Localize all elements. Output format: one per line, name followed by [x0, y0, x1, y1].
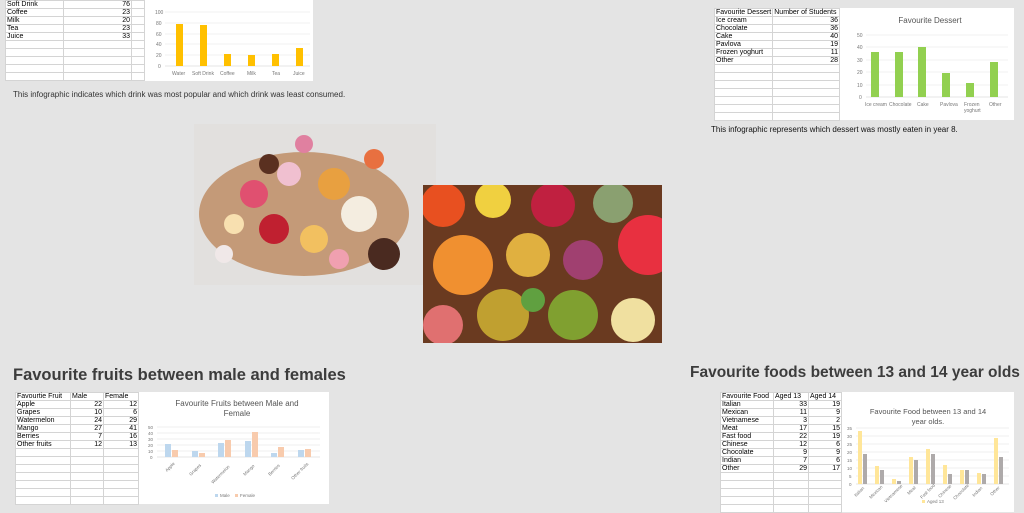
drink bar chart: Milk — [247, 71, 256, 77]
fruits bar chart: Favourite Fruits between Male and — [175, 399, 299, 408]
foods bar chart: 20 — [847, 450, 853, 455]
foods bar chart: Chocolate — [952, 482, 970, 501]
dessert bar chart: Ice cream — [865, 102, 887, 108]
foods table: Chocolate — [722, 449, 754, 456]
dessert bar chart: 50 — [857, 33, 863, 39]
drink table: Coffee — [7, 9, 28, 16]
fruits bar chart: Berries — [267, 463, 281, 477]
foods table — [720, 392, 842, 513]
drink bar chart: Tea — [272, 71, 280, 77]
dessert table: 36 — [830, 17, 838, 24]
fruits bar chart: 40 — [148, 431, 154, 436]
foods table: Indian — [722, 457, 741, 464]
dessert table: Other — [716, 57, 734, 64]
foods bar chart: Aged 13 — [927, 499, 944, 504]
dessert table: Number of Students — [774, 9, 837, 16]
foods bar chart: 10 — [847, 466, 853, 471]
drink bar chart: Soft Drink — [192, 71, 214, 77]
dessert bar chart: Cake — [917, 102, 929, 108]
fruits table: 7 — [98, 433, 102, 440]
dessert table: Ice cream — [716, 17, 747, 24]
dessert bar chart: Chocolate — [889, 102, 912, 108]
fruits bar chart: 10 — [148, 449, 154, 454]
foods bar chart: 5 — [849, 474, 852, 479]
drink bar chart: Coffee — [220, 71, 235, 77]
fruits table: 27 — [94, 425, 102, 432]
dessert bar chart: 10 — [857, 83, 863, 89]
foods table: 11 — [800, 409, 807, 416]
heading: fruits: Favourite fruits between male and females — [13, 366, 346, 384]
drink table: 33 — [122, 33, 130, 40]
dessert bar chart: 30 — [857, 58, 863, 64]
drink bar chart: 80 — [156, 21, 162, 27]
foods table: Chinese — [722, 441, 748, 448]
foods bar chart: Italian — [853, 485, 866, 498]
foods bar chart: Indian — [971, 485, 984, 498]
drink table: 23 — [122, 9, 130, 16]
fruits bar chart: 30 — [148, 437, 154, 442]
dessert table: Chocolate — [716, 25, 748, 32]
fruits bar chart: 20 — [148, 443, 154, 448]
fruits table: Male — [72, 393, 87, 400]
fruits table: 6 — [133, 409, 137, 416]
fruits table: 16 — [129, 433, 137, 440]
foods table: 17 — [799, 425, 807, 432]
drink bar chart: 60 — [156, 32, 162, 38]
foods bar chart: year olds. — [912, 417, 944, 426]
fruits bar chart: Male — [220, 493, 230, 498]
heading: foods: Favourite foods between 13 and 14 year olds — [690, 364, 1020, 381]
fruits table: Grapes — [17, 409, 40, 416]
drink table: 20 — [122, 17, 130, 24]
drink table: Tea — [7, 25, 18, 32]
foods table: Vietnamese — [722, 417, 759, 424]
foods bar chart: 30 — [847, 434, 853, 439]
fruits bar chart: Grapes — [188, 462, 203, 477]
foods table: 15 — [832, 425, 840, 432]
fruits table: Other fruits — [17, 441, 52, 448]
fruits table: 10 — [94, 409, 102, 416]
dessert table: 28 — [830, 57, 838, 64]
foods table: 22 — [799, 433, 807, 440]
foods table: 9 — [803, 449, 807, 456]
fruits table — [15, 392, 139, 505]
foods table: Aged 13 — [775, 393, 801, 400]
foods bar chart: Chinese — [937, 483, 953, 499]
foods bar chart: Meat — [906, 485, 917, 496]
dessert bar chart: yoghurt — [964, 108, 981, 114]
dessert table: Frozen yoghurt — [716, 49, 763, 56]
drink bar chart — [145, 0, 313, 81]
drink table: Juice — [7, 33, 23, 40]
foods table: Italian — [722, 401, 741, 408]
panel: favourite dessert — [714, 8, 1014, 120]
fruits bar chart: Watermelon — [210, 464, 231, 485]
drink table: 76 — [122, 1, 130, 8]
foods bar chart — [847, 407, 1009, 504]
drink bar chart: Juice — [293, 71, 305, 77]
image: dessert platter — [199, 135, 409, 276]
fruits bar chart: 0 — [150, 455, 153, 460]
panel: favourite drink — [5, 0, 313, 81]
foods bar chart: Vietnamese — [883, 483, 904, 504]
foods bar chart: Mexican — [868, 484, 884, 500]
dessert bar chart: Favourite Dessert — [898, 16, 962, 25]
dessert bar chart: 0 — [859, 95, 862, 101]
caption: dessert: This infographic represents which dessert was mostly eaten in year 8. — [711, 125, 958, 134]
dessert table: 36 — [830, 25, 838, 32]
foods table: Fast food — [722, 433, 751, 440]
foods bar chart: 0 — [849, 482, 852, 487]
dessert table: Favourite Dessert — [716, 9, 771, 16]
dessert bar chart: Frozen — [964, 102, 980, 108]
dessert bar chart — [857, 16, 1008, 114]
foods bar chart: 25 — [847, 442, 853, 447]
foods table: Other — [722, 465, 740, 472]
fruits table: Watermelon — [17, 417, 54, 424]
panel: foods — [720, 392, 1014, 512]
fruits table: 13 — [129, 441, 137, 448]
drink table — [5, 0, 145, 81]
foods table: 2 — [836, 417, 840, 424]
foods table: 9 — [836, 449, 840, 456]
fruits bar chart: Apple — [164, 461, 176, 473]
drink bar chart: 20 — [156, 53, 162, 59]
panel: fruits — [15, 392, 329, 504]
fruits bar chart — [148, 399, 320, 498]
foods table: 3 — [803, 417, 807, 424]
dessert table: Pavlova — [716, 41, 741, 48]
fruits table: 12 — [129, 401, 137, 408]
fruits table: Berries — [17, 433, 39, 440]
drink table: Milk — [7, 17, 19, 24]
fruits table: 29 — [129, 417, 137, 424]
image: tropical fruits — [423, 185, 662, 343]
foods table: Aged 14 — [810, 393, 836, 400]
foods table: Mexican — [722, 409, 748, 416]
foods bar chart: Favourite Food between 13 and 14 — [870, 407, 986, 416]
fruits bar chart: Mango — [242, 463, 256, 477]
foods table: Meat — [722, 425, 738, 432]
dessert bar chart: Pavlova — [940, 102, 958, 108]
dessert table: 11 — [831, 49, 838, 56]
dessert bar chart: Other — [989, 102, 1002, 108]
foods bar chart: 15 — [847, 458, 853, 463]
foods table: 17 — [832, 465, 840, 472]
foods table: Favourite Food — [722, 393, 769, 400]
foods table: 7 — [803, 457, 807, 464]
fruits table: Mango — [17, 425, 38, 432]
dessert table — [714, 8, 840, 121]
drink table: Soft Drink — [7, 1, 38, 8]
foods table: 33 — [799, 401, 807, 408]
fruits bar chart: 50 — [148, 425, 154, 430]
foods table: 6 — [836, 441, 840, 448]
foods table: 19 — [832, 433, 840, 440]
fruits table: Female — [105, 393, 128, 400]
foods bar chart: Fast food — [919, 483, 936, 500]
drink bar chart: Water — [172, 71, 185, 77]
foods table: 12 — [799, 441, 807, 448]
drink bar chart: 100 — [155, 10, 164, 16]
fruits table: Apple — [17, 401, 35, 408]
foods bar chart: Other — [989, 485, 1001, 497]
fruits table: 41 — [129, 425, 137, 432]
dessert table: Cake — [716, 33, 732, 40]
foods table: 9 — [836, 409, 840, 416]
foods table: 19 — [832, 401, 840, 408]
fruits table: 22 — [94, 401, 102, 408]
fruits bar chart: Female — [240, 493, 256, 498]
fruits table: 24 — [94, 417, 102, 424]
foods bar chart: 35 — [847, 426, 853, 431]
fruits bar chart: Other fruits — [290, 461, 310, 481]
foods table: 6 — [836, 457, 840, 464]
foods table: 29 — [799, 465, 807, 472]
fruits table: 12 — [94, 441, 102, 448]
dessert bar chart: 20 — [857, 70, 863, 76]
drink table: 23 — [122, 25, 130, 32]
fruits table: Favourtie Fruit — [17, 393, 62, 400]
fruits bar chart: Female — [224, 409, 251, 418]
dessert bar chart: 40 — [857, 45, 863, 51]
dessert table: 19 — [830, 41, 838, 48]
dessert table: 40 — [830, 33, 838, 40]
drink bar chart: 0 — [158, 64, 161, 70]
drink bar chart: 40 — [156, 42, 162, 48]
caption: drink: This infographic indicates which drink was most popular and which drink was least consumed. — [13, 90, 345, 99]
